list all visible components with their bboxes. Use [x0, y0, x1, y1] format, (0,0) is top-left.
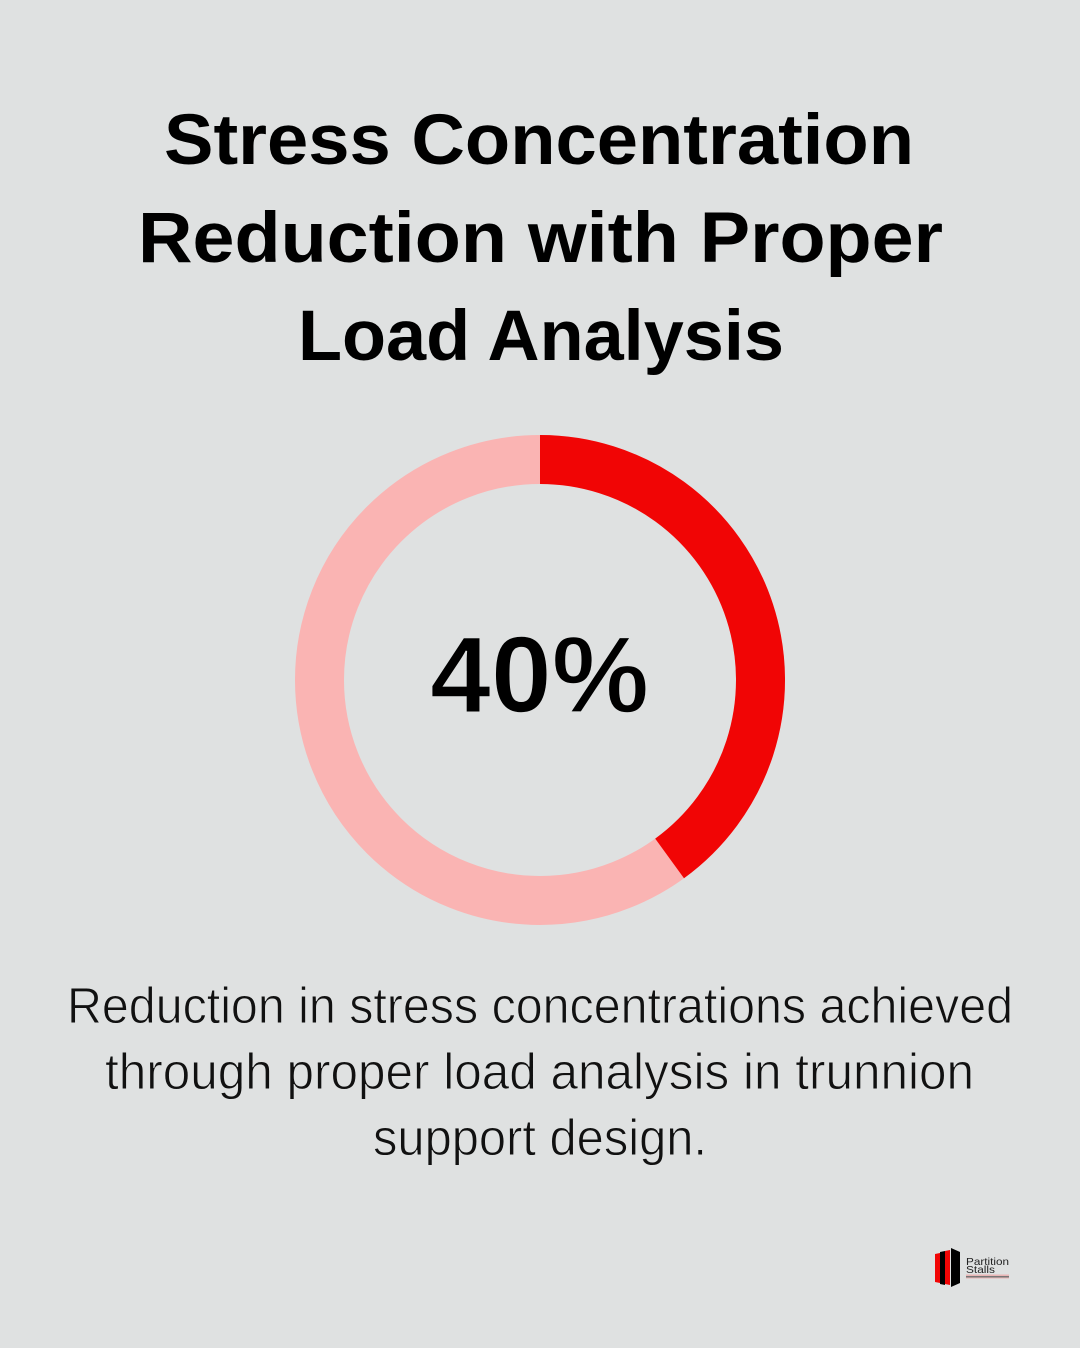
donut value arc	[540, 460, 761, 858]
donut track	[320, 460, 760, 900]
description	[67, 977, 1013, 1166]
logo wordmark: Partition	[966, 1256, 1009, 1268]
description: Reduction in stress concentrations achieved	[67, 977, 1013, 1034]
logo: Partition Stalls	[935, 1248, 1009, 1287]
donut chart: 40%	[320, 460, 761, 900]
logo wordmark: Stalls	[966, 1264, 995, 1276]
logo tagline	[966, 1274, 1009, 1278]
title: Stress Concentration	[164, 101, 914, 180]
title: Reduction with Proper	[138, 199, 943, 278]
logo icon	[935, 1248, 960, 1287]
title	[138, 101, 943, 376]
description: through proper load analysis in trunnion	[105, 1043, 974, 1100]
title: Load Analysis	[298, 297, 784, 376]
logo wordmark	[966, 1256, 1009, 1276]
center value: 40%	[430, 614, 649, 736]
description: support design.	[373, 1109, 707, 1166]
